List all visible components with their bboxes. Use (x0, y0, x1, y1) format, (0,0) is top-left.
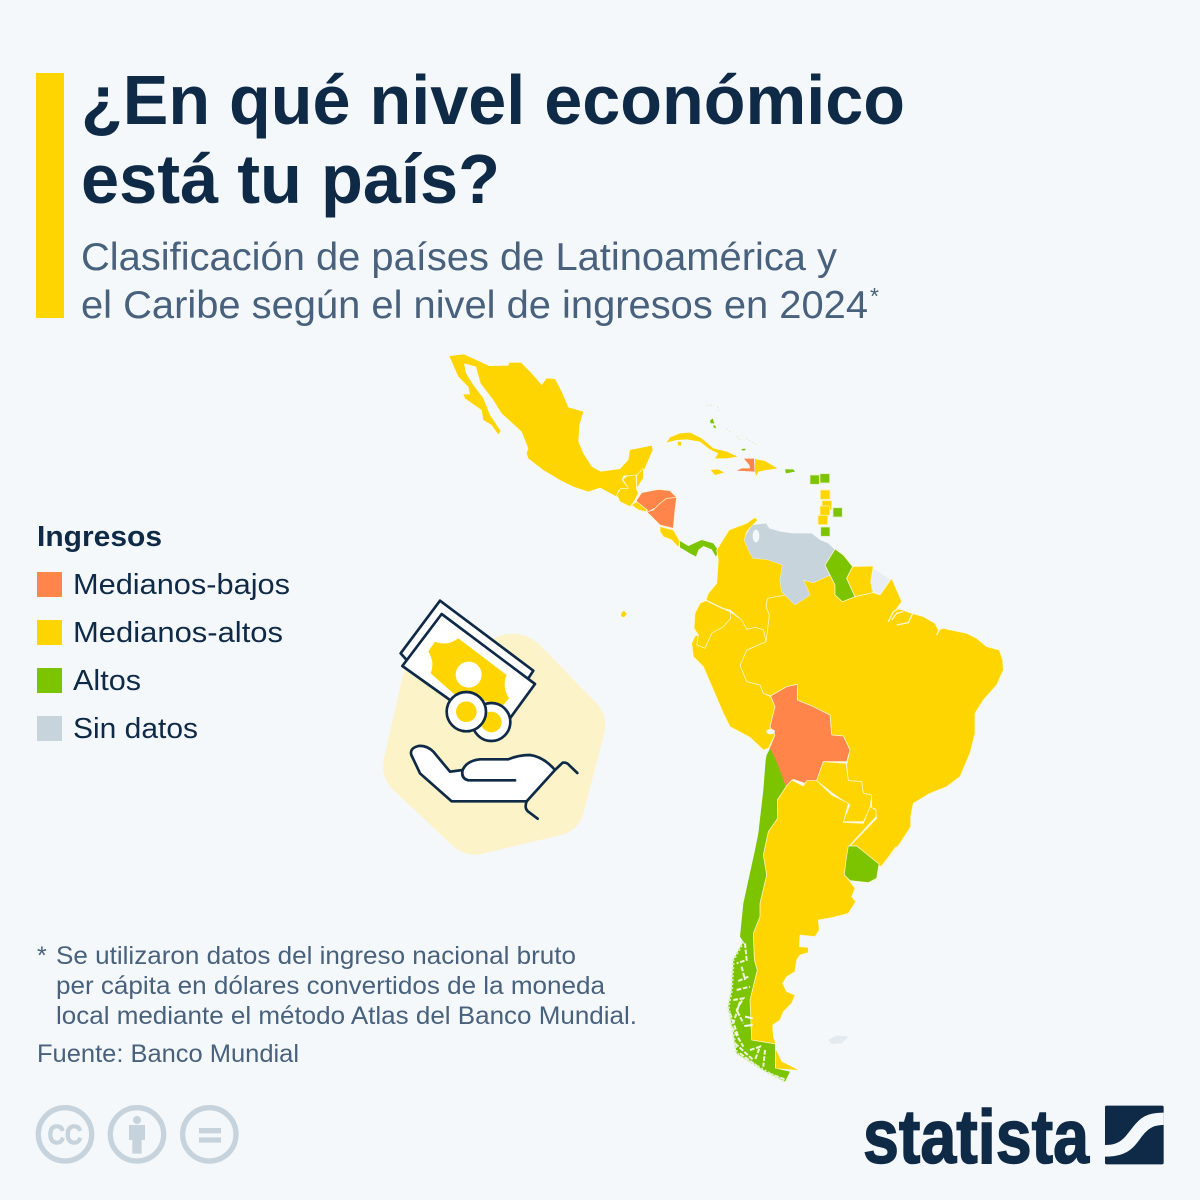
icon background (383, 634, 605, 855)
Costa Rica (660, 527, 680, 547)
legend item: Medianos-bajos: Medianos-bajos (73, 569, 290, 601)
accent bar (36, 73, 64, 318)
footnote: per cápita en dólares convertidos de la moneda (56, 972, 605, 1000)
Lake Maracaibo (753, 530, 759, 542)
legend item: Medianos-altos: Medianos-altos (73, 617, 283, 649)
icon: attribution (110, 1108, 164, 1161)
Paraguay (817, 762, 872, 822)
Jamaica (711, 469, 724, 475)
wordmark: statista (863, 1095, 1090, 1180)
map: Latin America and the Caribbean (449, 354, 1003, 1082)
Chile (728, 748, 790, 1082)
source: Fuente: Banco Mundial (37, 1040, 299, 1068)
footnote (37, 942, 637, 1030)
icon: creative commons: CC (48, 1119, 82, 1150)
footnote: local mediante el método Atlas del Banco Mundial. (56, 1002, 637, 1030)
title: ¿En qué nivel económico (81, 61, 905, 139)
Guatemala (617, 475, 638, 507)
subtitle: * (870, 283, 879, 309)
Argentina (750, 780, 876, 1044)
Haiti (737, 459, 755, 472)
subtitle: Clasificación de países de Latinoamérica y (81, 236, 838, 279)
hand (411, 746, 555, 801)
Amazon mouth (888, 607, 940, 635)
Lake Titicaca (766, 729, 775, 734)
Galápagos (621, 611, 627, 617)
title: está tu país? (81, 140, 500, 218)
Bolivia (769, 684, 850, 787)
Tierra del Fuego (776, 1049, 798, 1070)
icon: no derivatives (183, 1108, 236, 1161)
legend title: Ingresos (37, 521, 162, 553)
legend item: Sin datos: Sin datos (73, 713, 198, 745)
Colombia (706, 517, 785, 642)
Argentine inlets (744, 1017, 753, 1026)
front banknote (402, 614, 535, 718)
icon: hand receiving money (383, 601, 605, 855)
back banknote (401, 601, 533, 678)
Dominican Republic (755, 459, 777, 476)
legend item: Altos (37, 665, 141, 697)
Suriname (847, 566, 873, 597)
coin back (472, 703, 510, 741)
coin front (447, 692, 486, 731)
banknote print (428, 638, 509, 705)
Cuba (667, 433, 737, 458)
El Salvador (632, 502, 647, 512)
icon: creative commons (38, 1108, 92, 1161)
French Guiana (871, 568, 890, 595)
Caribbean islands (667, 405, 795, 476)
Peru (692, 612, 775, 750)
Puerto Rico (785, 469, 795, 473)
statista logo (863, 1095, 1164, 1180)
footnote: * (37, 942, 47, 970)
Brazil (740, 575, 1003, 867)
Central America (617, 468, 718, 557)
Venezuela (744, 523, 835, 605)
Falkland Islands (828, 1035, 848, 1044)
Uruguay (844, 846, 879, 883)
Panama (680, 540, 718, 557)
South America (692, 517, 1003, 867)
subtitle: el Caribe según el nivel de ingresos en 2024 (81, 284, 868, 327)
legend item: Altos: Altos (73, 665, 141, 697)
logo mark (1105, 1106, 1164, 1164)
Honduras and Nicaragua (637, 489, 677, 528)
Brazilian lagoon (882, 847, 897, 867)
subtitle (81, 236, 879, 327)
footnote: Se utilizaron datos del ingreso nacional bruto (56, 942, 576, 970)
Ecuador (694, 601, 731, 648)
Guyana (825, 549, 855, 602)
title (81, 61, 905, 218)
Bahamas (710, 418, 746, 450)
Mexico (449, 354, 653, 497)
Chilean fjords (730, 943, 787, 1080)
legend (37, 521, 290, 745)
small island markers (621, 474, 842, 617)
license icons (38, 1108, 236, 1161)
Belize (637, 468, 643, 488)
Southern Cone (728, 748, 897, 1082)
